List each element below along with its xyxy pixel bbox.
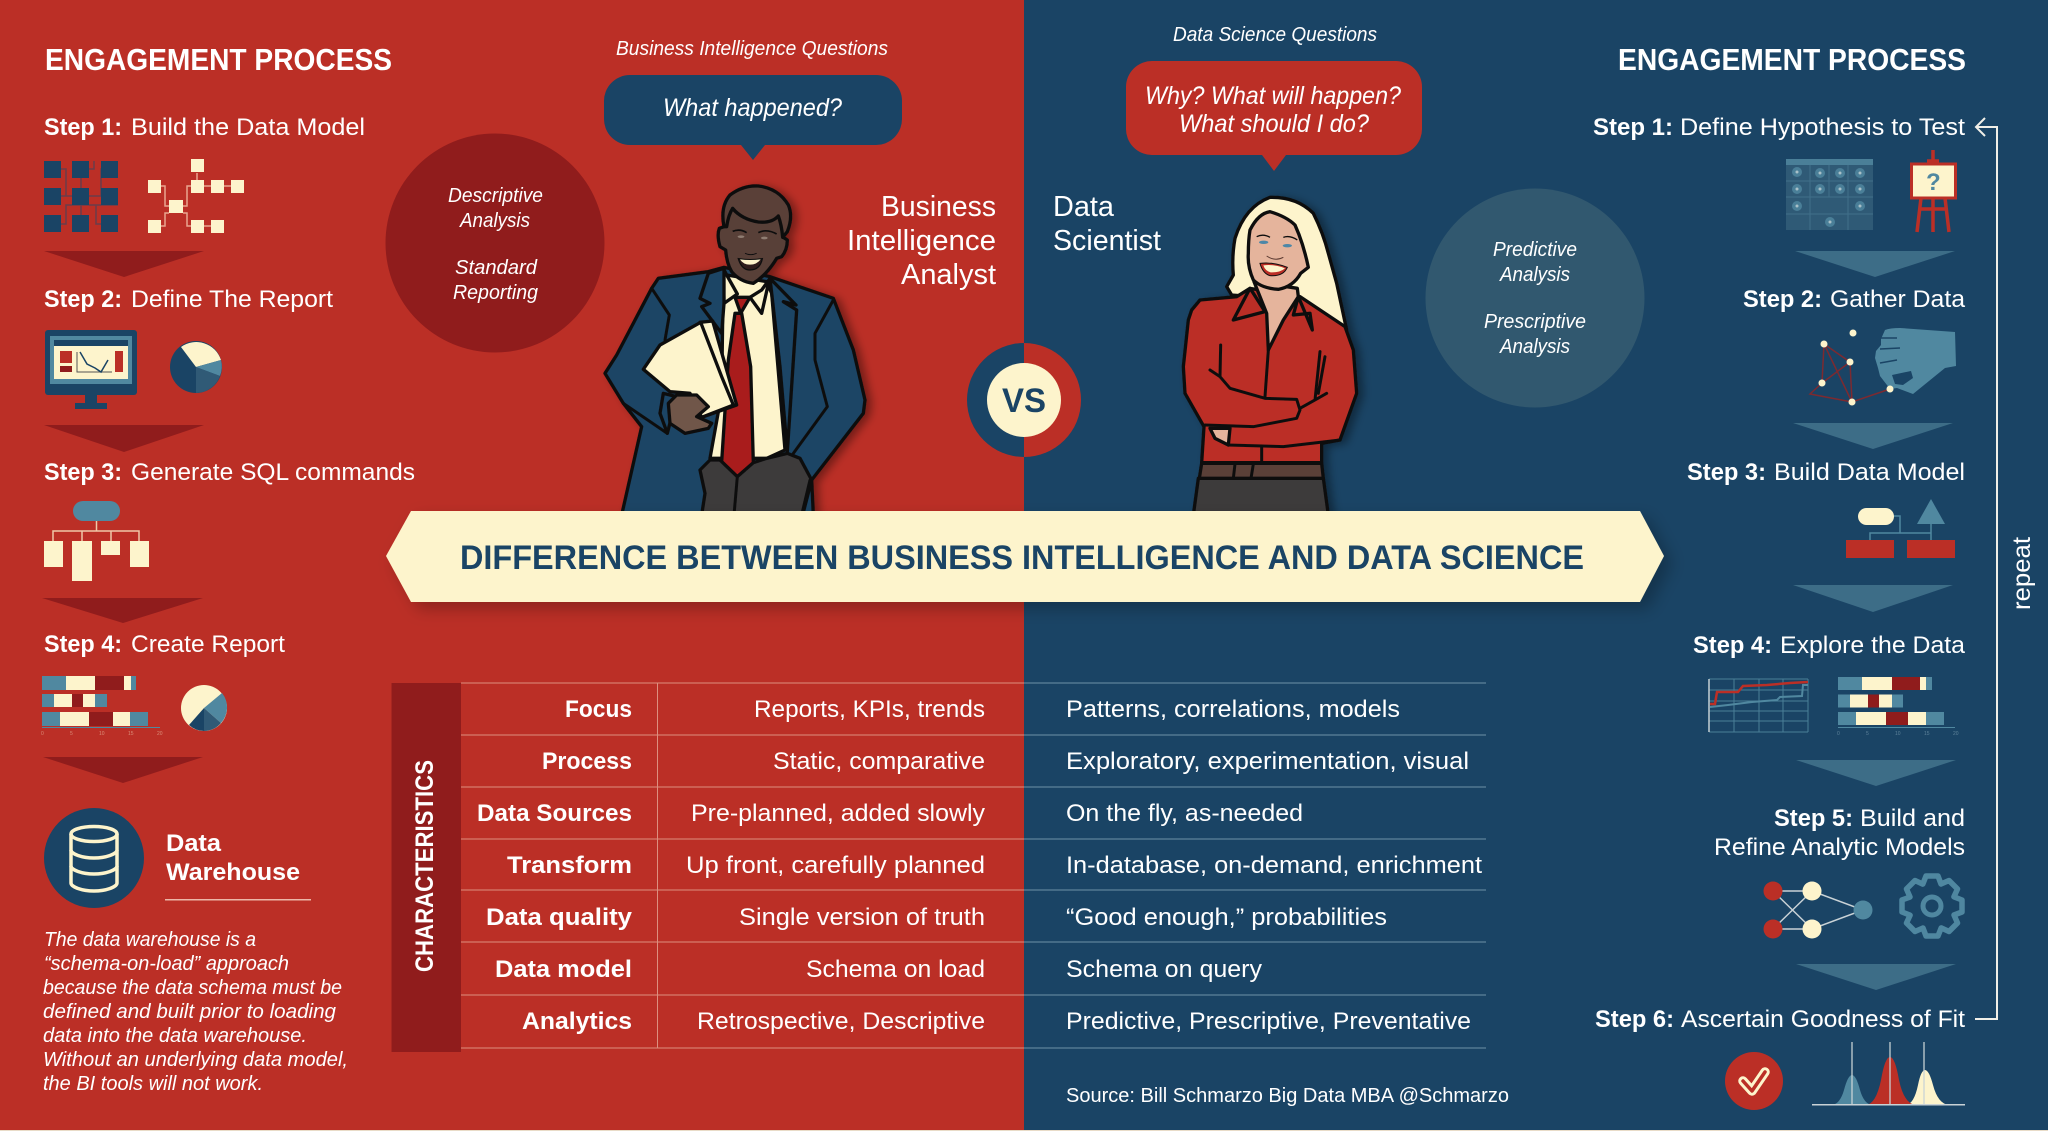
background: red half bbox=[0, 0, 1024, 1131]
arrow: step 4 to 5 bbox=[1796, 760, 1956, 786]
icon: easel with question mark bbox=[1912, 150, 1956, 232]
business intelligence values: Schema on load bbox=[806, 956, 985, 983]
data science values: Patterns, correlations, models bbox=[1066, 696, 1400, 723]
step 1 label: Step 1: bbox=[1593, 114, 1673, 141]
text block: data warehouse description: because the data schema must be bbox=[43, 977, 342, 999]
icon: pie chart report bbox=[181, 685, 227, 731]
text block: data warehouse description: Without an underlying data model, bbox=[43, 1049, 348, 1071]
row labels bbox=[477, 696, 633, 1035]
label: business intelligence analyst: Intelligence bbox=[847, 225, 996, 257]
step 4 label bbox=[44, 631, 285, 658]
heading: data warehouse: Warehouse bbox=[166, 859, 300, 886]
text block: data warehouse description: defined and built prior to loading bbox=[43, 1001, 336, 1023]
background: blue half bbox=[1024, 0, 2048, 1131]
icon: stacked bar chart: 20 bbox=[1953, 731, 1959, 737]
heading: data warehouse bbox=[166, 830, 300, 886]
arrow: step 4 to warehouse bbox=[43, 757, 203, 783]
badge: VS: VS bbox=[1002, 382, 1046, 420]
step 4 label: Explore the Data bbox=[1780, 632, 1966, 659]
data science values: In-database, on-demand, enrichment bbox=[1066, 852, 1482, 879]
source note: Source: Bill Schmarzo Big Data MBA @Schmarzo bbox=[1066, 1084, 1509, 1107]
step 3 label bbox=[1687, 459, 1965, 486]
step 4 label bbox=[1693, 632, 1966, 659]
business intelligence values: Up front, carefully planned bbox=[686, 852, 985, 879]
characteristics side label bbox=[392, 683, 461, 1052]
icon: stacked bar chart bbox=[41, 676, 163, 737]
row labels: Data model bbox=[495, 956, 632, 983]
icon: check badge bbox=[1725, 1052, 1783, 1110]
speech bubble: what happened bbox=[604, 75, 902, 160]
business intelligence values: Pre-planned, added slowly bbox=[691, 800, 985, 827]
label: business intelligence analyst: Business bbox=[881, 191, 996, 223]
label: business intelligence questions: Business Intelligence Questions bbox=[616, 38, 888, 60]
data science values: “Good enough,” probabilities bbox=[1066, 904, 1387, 931]
data science values: On the fly, as-needed bbox=[1066, 800, 1303, 827]
callout: predictive analysis circle: Analysis bbox=[1499, 264, 1570, 286]
icon: hypothesis table bbox=[1786, 159, 1873, 230]
speech bubble: why what will happen bbox=[1126, 61, 1422, 171]
callout: descriptive analysis circle bbox=[386, 134, 604, 352]
illustration: business analyst bbox=[605, 186, 865, 515]
icon: stacked bar chart: 15 bbox=[1924, 731, 1930, 737]
icon: gear bbox=[1902, 876, 1962, 936]
text block: data warehouse description: The data warehouse is a bbox=[44, 929, 256, 951]
characteristics side label: CHARACTERISTICS bbox=[411, 760, 439, 972]
step 3 label: Step 3: bbox=[44, 459, 122, 486]
step 1 label: Define Hypothesis to Test bbox=[1680, 114, 1965, 141]
icon: data model diagrams bbox=[44, 159, 244, 233]
step 5 label bbox=[1714, 805, 1965, 861]
text block: data warehouse description: the BI tools will not work. bbox=[43, 1073, 263, 1095]
text block: data warehouse description: data into the data warehouse. bbox=[43, 1025, 307, 1047]
arrow: step 1 to 2 bbox=[1795, 251, 1955, 277]
step 2 label: Gather Data bbox=[1830, 286, 1966, 313]
label: data scientist: Scientist bbox=[1053, 225, 1161, 257]
step 1 label: Step 1: bbox=[44, 114, 122, 141]
arrow: step 5 to 6 bbox=[1796, 964, 1956, 990]
text block: data warehouse description: “schema-on-load” approach bbox=[44, 953, 289, 975]
icon: stacked bar chart bbox=[1837, 677, 1959, 737]
callout: descriptive analysis circle: Standard bbox=[455, 257, 538, 279]
title banner: DIFFERENCE BETWEEN BUSINESS INTELLIGENCE AND DATA SCIENCE bbox=[460, 539, 1584, 577]
business intelligence values bbox=[686, 696, 985, 1035]
icon: pie chart bbox=[170, 341, 222, 393]
label: data scientist bbox=[1053, 191, 1161, 257]
step 2 label: Step 2: bbox=[44, 286, 122, 313]
icon: stacked bar chart: 0 bbox=[1837, 731, 1840, 737]
speech bubble: why what will happen: What should I do? bbox=[1179, 110, 1369, 138]
step 3 label: Build Data Model bbox=[1774, 459, 1965, 486]
row labels: Process bbox=[542, 748, 632, 775]
text block: data warehouse description bbox=[43, 929, 348, 1095]
step 4 label: Step 4: bbox=[44, 631, 122, 658]
step 5 label: Refine Analytic Models bbox=[1714, 834, 1965, 861]
callout: predictive analysis circle: Analysis bbox=[1499, 336, 1570, 358]
panel: BI engagement process bbox=[41, 42, 415, 1095]
step 4 label: Step 4: bbox=[1693, 632, 1772, 659]
icon: monitor dashboard bbox=[45, 330, 137, 409]
label: business intelligence analyst bbox=[847, 191, 996, 291]
step 3 label: Generate SQL commands bbox=[131, 459, 415, 486]
step 1 label: Build the Data Model bbox=[131, 114, 365, 141]
icon: stacked bar chart: 15 bbox=[128, 731, 134, 737]
row labels: Focus bbox=[565, 696, 632, 723]
business intelligence values: Static, comparative bbox=[773, 748, 985, 775]
icon: line chart bbox=[1709, 679, 1808, 732]
arrow: step 1 to 2 bbox=[44, 251, 204, 277]
icon: stacked bar chart: 10 bbox=[99, 731, 105, 737]
business intelligence values: Reports, KPIs, trends bbox=[754, 696, 985, 723]
icon: stacked bar chart: 10 bbox=[1895, 731, 1901, 737]
icon: easel with question mark: ? bbox=[1926, 169, 1941, 196]
data science values: Predictive, Prescriptive, Preventative bbox=[1066, 1008, 1471, 1035]
step 2 label bbox=[1743, 286, 1966, 313]
speech bubble: what happened: What happened? bbox=[663, 94, 842, 122]
callout: predictive analysis circle bbox=[1426, 188, 1644, 408]
panel: characteristics table bbox=[392, 683, 1486, 1052]
callout: descriptive analysis circle: Reporting bbox=[453, 282, 538, 304]
panel: data science engagement process bbox=[1593, 42, 2036, 1110]
label: data science questions: Data Science Questions bbox=[1173, 24, 1377, 46]
arrow: step 3 to 4 bbox=[42, 598, 203, 623]
callout: predictive analysis circle: Prescriptive bbox=[1484, 311, 1586, 333]
arrow: step 2 to 3 bbox=[44, 425, 204, 452]
row rules bbox=[461, 683, 1486, 1048]
row labels: Transform bbox=[507, 852, 632, 879]
icon: data model diagram bbox=[1846, 499, 1955, 558]
heading: engagement process left: ENGAGEMENT PROCESS bbox=[45, 42, 392, 77]
heading: data warehouse: Data bbox=[166, 830, 222, 857]
panel: right top heading area bbox=[1053, 24, 1422, 257]
label: repeat: repeat bbox=[2008, 537, 2036, 610]
data science values: Exploratory, experimentation, visual bbox=[1066, 748, 1469, 775]
step 2 label: Define The Report bbox=[131, 286, 333, 313]
data science values: Schema on query bbox=[1066, 956, 1262, 983]
data science values bbox=[1066, 696, 1482, 1035]
callout: descriptive analysis circle: Descriptive bbox=[448, 185, 543, 207]
step 2 label: Step 2: bbox=[1743, 286, 1822, 313]
icon: stacked bar chart: 20 bbox=[157, 731, 163, 737]
step 1 label bbox=[44, 114, 365, 141]
callout: descriptive analysis circle: Analysis bbox=[459, 210, 530, 232]
illustration: data scientist bbox=[1183, 197, 1357, 515]
icon: neural network bbox=[1764, 882, 1872, 938]
business intelligence values: Retrospective, Descriptive bbox=[697, 1008, 985, 1035]
row labels: Data quality bbox=[486, 904, 633, 931]
step 6 label: Step 6: bbox=[1595, 1006, 1674, 1033]
badge: VS bbox=[967, 343, 1081, 457]
label: data scientist: Data bbox=[1053, 191, 1115, 223]
step 6 label: Ascertain Goodness of Fit bbox=[1681, 1006, 1965, 1033]
icon: network and hand bbox=[1810, 328, 1956, 406]
speech bubble: why what will happen: Why? What will happen? bbox=[1145, 82, 1401, 110]
icon: database bbox=[44, 808, 144, 908]
arrow: step 2 to 3 bbox=[1793, 423, 1953, 449]
arrow: repeat loop bbox=[1975, 118, 1997, 1019]
bottom edge line bbox=[0, 1130, 2048, 1131]
step 5 label: Build and bbox=[1860, 805, 1965, 832]
step 3 label: Step 3: bbox=[1687, 459, 1766, 486]
title banner bbox=[386, 511, 1664, 602]
heading: engagement process right: ENGAGEMENT PROCESS bbox=[1618, 42, 1966, 77]
chart: distribution curves bbox=[1812, 1042, 1965, 1106]
step 4 label: Create Report bbox=[131, 631, 285, 658]
row labels: Data Sources bbox=[477, 800, 632, 827]
icon: stacked bar chart: 5 bbox=[1866, 731, 1869, 737]
callout: predictive analysis circle: Predictive bbox=[1493, 239, 1577, 261]
step 2 label bbox=[44, 286, 333, 313]
icon: stacked bar chart: 0 bbox=[41, 731, 44, 737]
icon: stacked bar chart: 5 bbox=[70, 731, 73, 737]
icon: org chart bbox=[44, 501, 149, 581]
step 5 label: Step 5: bbox=[1774, 805, 1853, 832]
arrow: step 3 to 4 bbox=[1793, 585, 1953, 612]
row labels: Analytics bbox=[522, 1008, 632, 1035]
label: business intelligence analyst: Analyst bbox=[901, 259, 996, 291]
business intelligence values: Single version of truth bbox=[739, 904, 985, 931]
